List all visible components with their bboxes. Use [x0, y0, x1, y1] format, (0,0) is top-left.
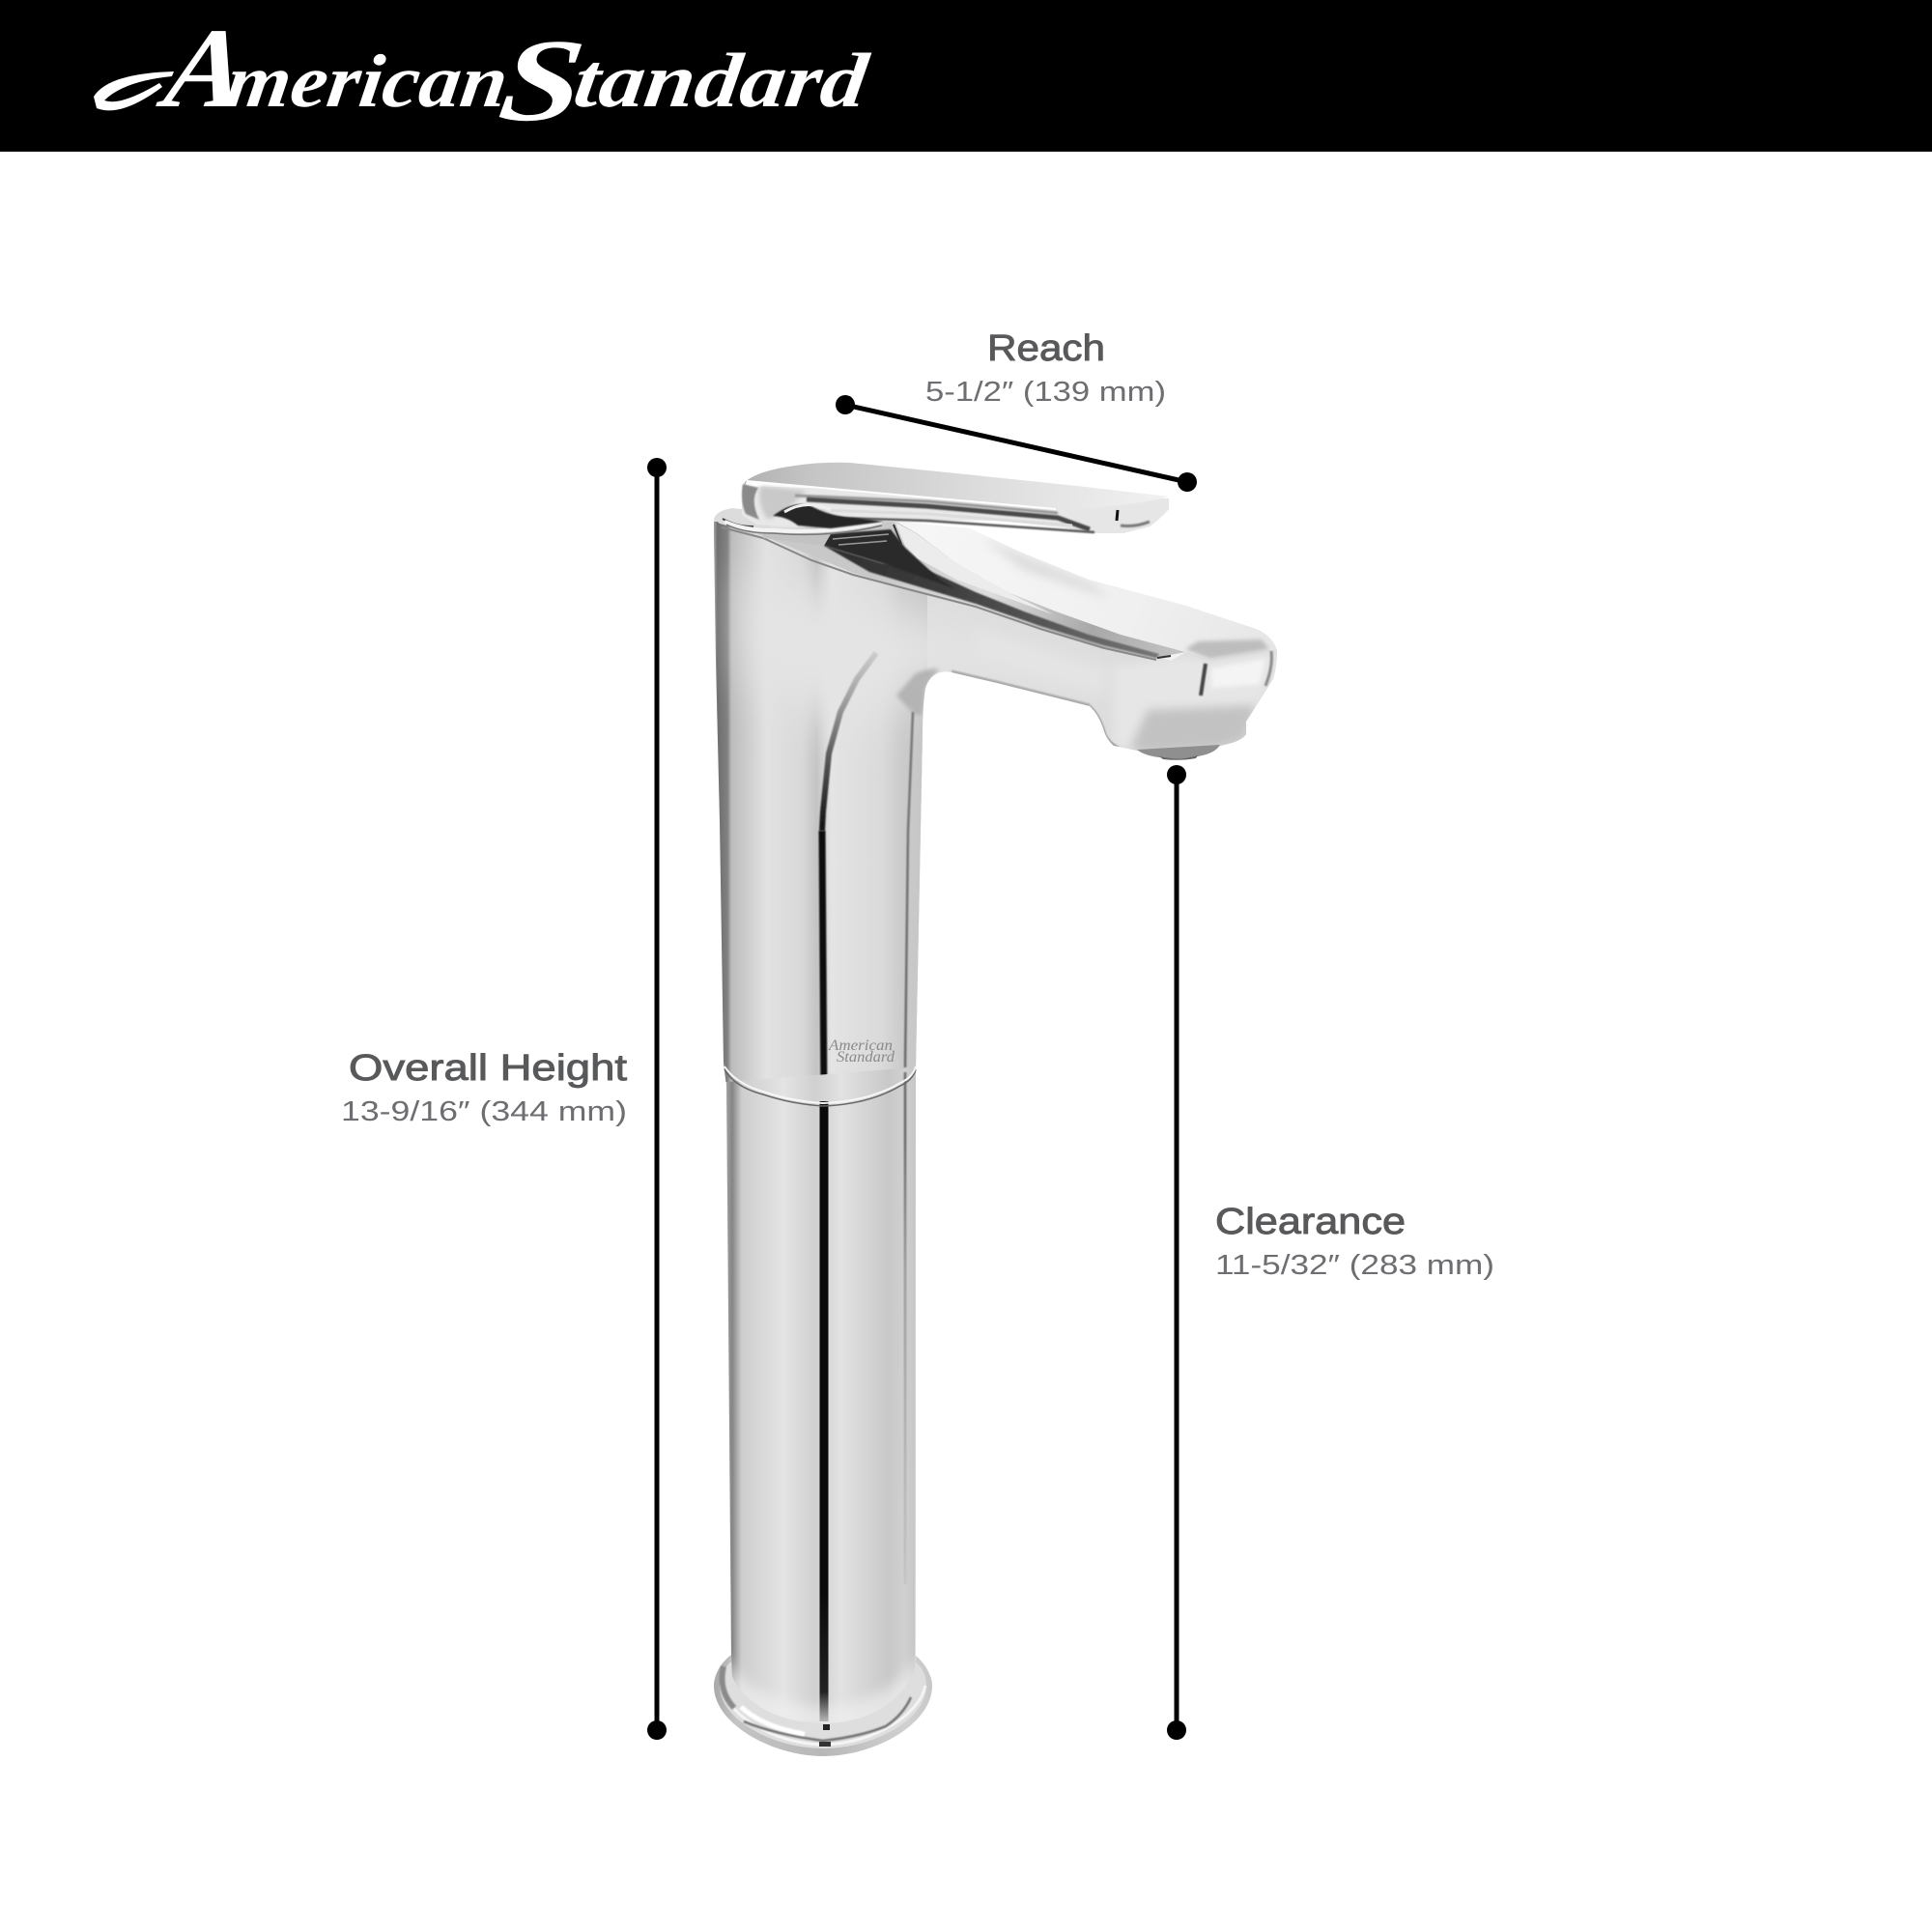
label: overall height: 13-9/16″ (344 mm) [341, 1096, 627, 1127]
dark reflection in strip [824, 546, 1159, 658]
lower column [724, 1067, 918, 1729]
label: reach: Reach [987, 328, 1105, 369]
arch inner shade [896, 668, 939, 715]
handle top face [742, 463, 1169, 510]
dimension line: clearance [1167, 765, 1186, 1740]
label: overall height [341, 1048, 628, 1127]
spout groove chrome strip [722, 522, 1186, 661]
label: clearance [1215, 1202, 1494, 1281]
label: clearance: Clearance [1215, 1202, 1406, 1242]
engraved logo on column [828, 1037, 895, 1065]
spout top face [893, 520, 1277, 660]
logo wordmark: S [493, 15, 592, 146]
aerator [1137, 745, 1220, 760]
outer chrome strip [756, 522, 1185, 659]
handle side reflections [742, 481, 1169, 533]
lower black reflection [819, 1101, 829, 1721]
faucet body and spout silhouette [714, 509, 1277, 1676]
engraved logo on column: Standard [837, 1049, 895, 1065]
label: reach: 5-1/2″ (139 mm) [925, 377, 1166, 408]
body curved reflection line [822, 653, 876, 831]
lever handle [742, 463, 1169, 533]
label: clearance: 11-5/32″ (283 mm) [1215, 1250, 1494, 1281]
label: overall height: Overall Height [349, 1048, 628, 1089]
right reflection line [905, 712, 913, 1067]
faucet base flange [714, 1655, 932, 1756]
light band above reflection [895, 523, 1053, 614]
dimension line: reach [836, 395, 1197, 492]
body shading [710, 520, 1277, 1082]
upper column black reflection [822, 831, 824, 1104]
dimension line: overall height [647, 458, 667, 1740]
logo wordmark [94, 5, 879, 146]
engraved logo on column: American [828, 1037, 893, 1054]
label: reach [925, 328, 1166, 408]
header bar with logo [0, 0, 1932, 152]
column seam [724, 1066, 916, 1106]
dark curl under handle [773, 504, 884, 528]
top rim ring [714, 508, 882, 546]
faucet [710, 463, 1277, 1756]
spout tip [1119, 655, 1269, 744]
lower right reflection [904, 1072, 906, 1584]
logo wordmark: merican [221, 39, 513, 123]
logo wordmark: A [152, 5, 255, 131]
handle side [742, 486, 1169, 533]
logo wordmark: tandard [569, 38, 875, 124]
